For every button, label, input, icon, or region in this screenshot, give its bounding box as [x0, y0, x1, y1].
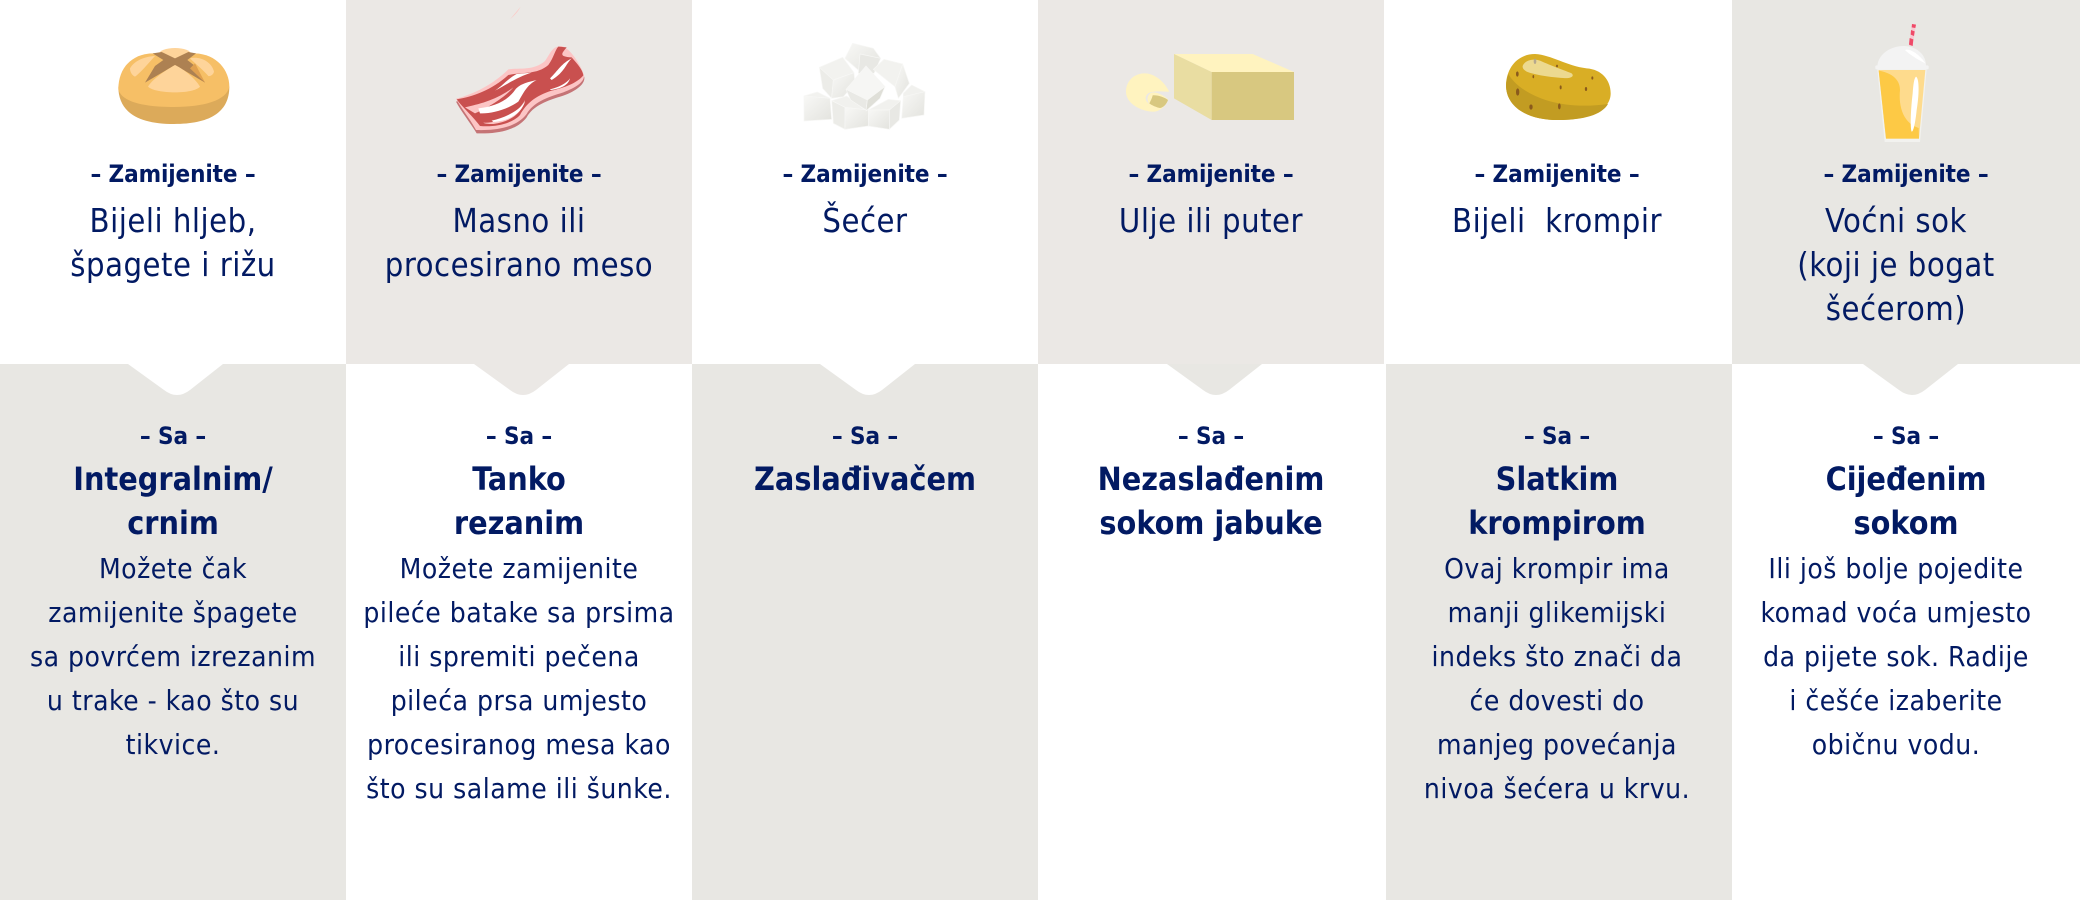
text: description, column 1: tikvice. [126, 728, 220, 760]
text: with, column 6: – Sa – [1873, 422, 1939, 450]
text: with, column 1: – Sa – [140, 422, 206, 450]
text: description, column 5: nivoa šećera u krvu. [1424, 772, 1690, 804]
text: food to replace, column 2: procesirano meso [385, 246, 653, 284]
text: food to replace, column 2: Masno ili [453, 202, 585, 240]
text: description, column 1: sa povrćem izrezanim [30, 640, 316, 672]
text: substitute, column 2: rezanim [454, 504, 584, 542]
text: description, column 5: Ovaj krompir ima [1444, 552, 1670, 584]
text: substitute, column 6: sokom [1854, 504, 1958, 542]
icon: sugar cubes [804, 43, 925, 130]
text: description, column 1: Možete čak [99, 552, 247, 584]
arrow: column 2 [474, 364, 569, 395]
icon: juice cup with straw [1876, 24, 1928, 142]
text: replace, column 3: – Zamijenite – [782, 160, 948, 188]
text: description, column 1 [30, 552, 316, 760]
text: description, column 6 [1760, 552, 2031, 760]
text: substitute, column 6 [1826, 460, 1986, 542]
text: food to replace, column 3: Šećer [822, 202, 908, 240]
text: food to replace, column 6: šećerom) [1826, 290, 1966, 328]
icon: butter block and curl [1126, 54, 1294, 120]
text: description, column 5: manjeg povećanja [1437, 728, 1677, 760]
text: description, column 2: procesiranog mesa kao [367, 728, 671, 760]
text: description, column 6: običnu vodu. [1812, 728, 1980, 760]
text: substitute, column 6: Cijeđenim [1826, 460, 1986, 498]
text: description, column 2: Možete zamijenite [400, 552, 638, 584]
icon: bread roll [118, 48, 230, 124]
text: substitute, column 1: crnim [127, 504, 219, 542]
text: with, column 2: – Sa – [486, 422, 552, 450]
text: description, column 5 [1424, 552, 1690, 804]
text: food to replace, column 1 [70, 202, 276, 284]
text: description, column 5: indeks što znači da [1432, 640, 1682, 672]
arrow: column 4 [1167, 364, 1262, 395]
arrow: column 6 [1863, 364, 1958, 395]
text: with, column 4: – Sa – [1178, 422, 1244, 450]
text: description, column 6: i češće izaberite [1789, 684, 2003, 716]
text: substitute, column 5: Slatkim [1496, 460, 1618, 498]
text: description, column 6: da pijete sok. Radije [1763, 640, 2029, 672]
text: food to replace, column 1: Bijeli hljeb, [90, 202, 256, 240]
text: description, column 2 [363, 552, 675, 804]
text: replace, column 6: – Zamijenite – [1823, 160, 1989, 188]
text: description, column 2: ili spremiti pečena [398, 640, 640, 672]
text: food to replace, column 1: špagete i rižu [70, 246, 276, 284]
text: substitute, column 4: Nezaslađenim [1098, 460, 1324, 498]
text: description, column 2: što su salame ili šunke. [366, 772, 672, 804]
text: substitute, column 2: Tanko [472, 460, 566, 498]
text: substitute, column 3: Zaslađivačem [754, 460, 976, 498]
text: with, column 5: – Sa – [1524, 422, 1590, 450]
icon: potato [1506, 54, 1611, 120]
text: food to replace, column 6: Voćni sok [1825, 202, 1967, 240]
text: replace, column 1: – Zamijenite – [90, 160, 256, 188]
text: food to replace, column 6 [1797, 202, 1995, 328]
text: description, column 5: manji glikemijski [1448, 596, 1666, 628]
text: food to replace, column 2 [385, 202, 653, 284]
text: food to replace, column 4: Ulje ili puter [1119, 202, 1303, 240]
text: substitute, column 2 [454, 460, 584, 542]
text: substitute, column 4 [1098, 460, 1324, 542]
text: with, column 3: – Sa – [832, 422, 898, 450]
text: substitute, column 1 [73, 460, 273, 542]
text: description, column 6: Ili još bolje pojedite [1768, 552, 2024, 584]
text: description, column 5: će dovesti do [1469, 684, 1645, 716]
text: description, column 1: u trake - kao što su [47, 684, 299, 716]
text: description, column 1: zamijenite špagete [48, 596, 298, 628]
arrow: column 1 [128, 364, 223, 395]
text: substitute, column 5: krompirom [1468, 504, 1646, 542]
text: description, column 2: pileće batake sa prsima [363, 596, 675, 628]
text: replace, column 2: – Zamijenite – [436, 160, 602, 188]
text: description, column 2: pileća prsa umjesto [391, 684, 647, 716]
text: substitute, column 4: sokom jabuke [1099, 504, 1323, 542]
text: replace, column 4: – Zamijenite – [1128, 160, 1294, 188]
text: replace, column 5: – Zamijenite – [1474, 160, 1640, 188]
icon: bacon [456, 7, 584, 134]
text: food to replace, column 6: (koji je bogat [1797, 246, 1995, 284]
text: description, column 6: komad voća umjesto [1760, 596, 2031, 628]
text: substitute, column 1: Integralnim/ [73, 460, 273, 498]
text: substitute, column 5 [1468, 460, 1646, 542]
text: food to replace, column 5: Bijeli krompir [1452, 202, 1662, 240]
arrow: column 3 [820, 364, 915, 395]
